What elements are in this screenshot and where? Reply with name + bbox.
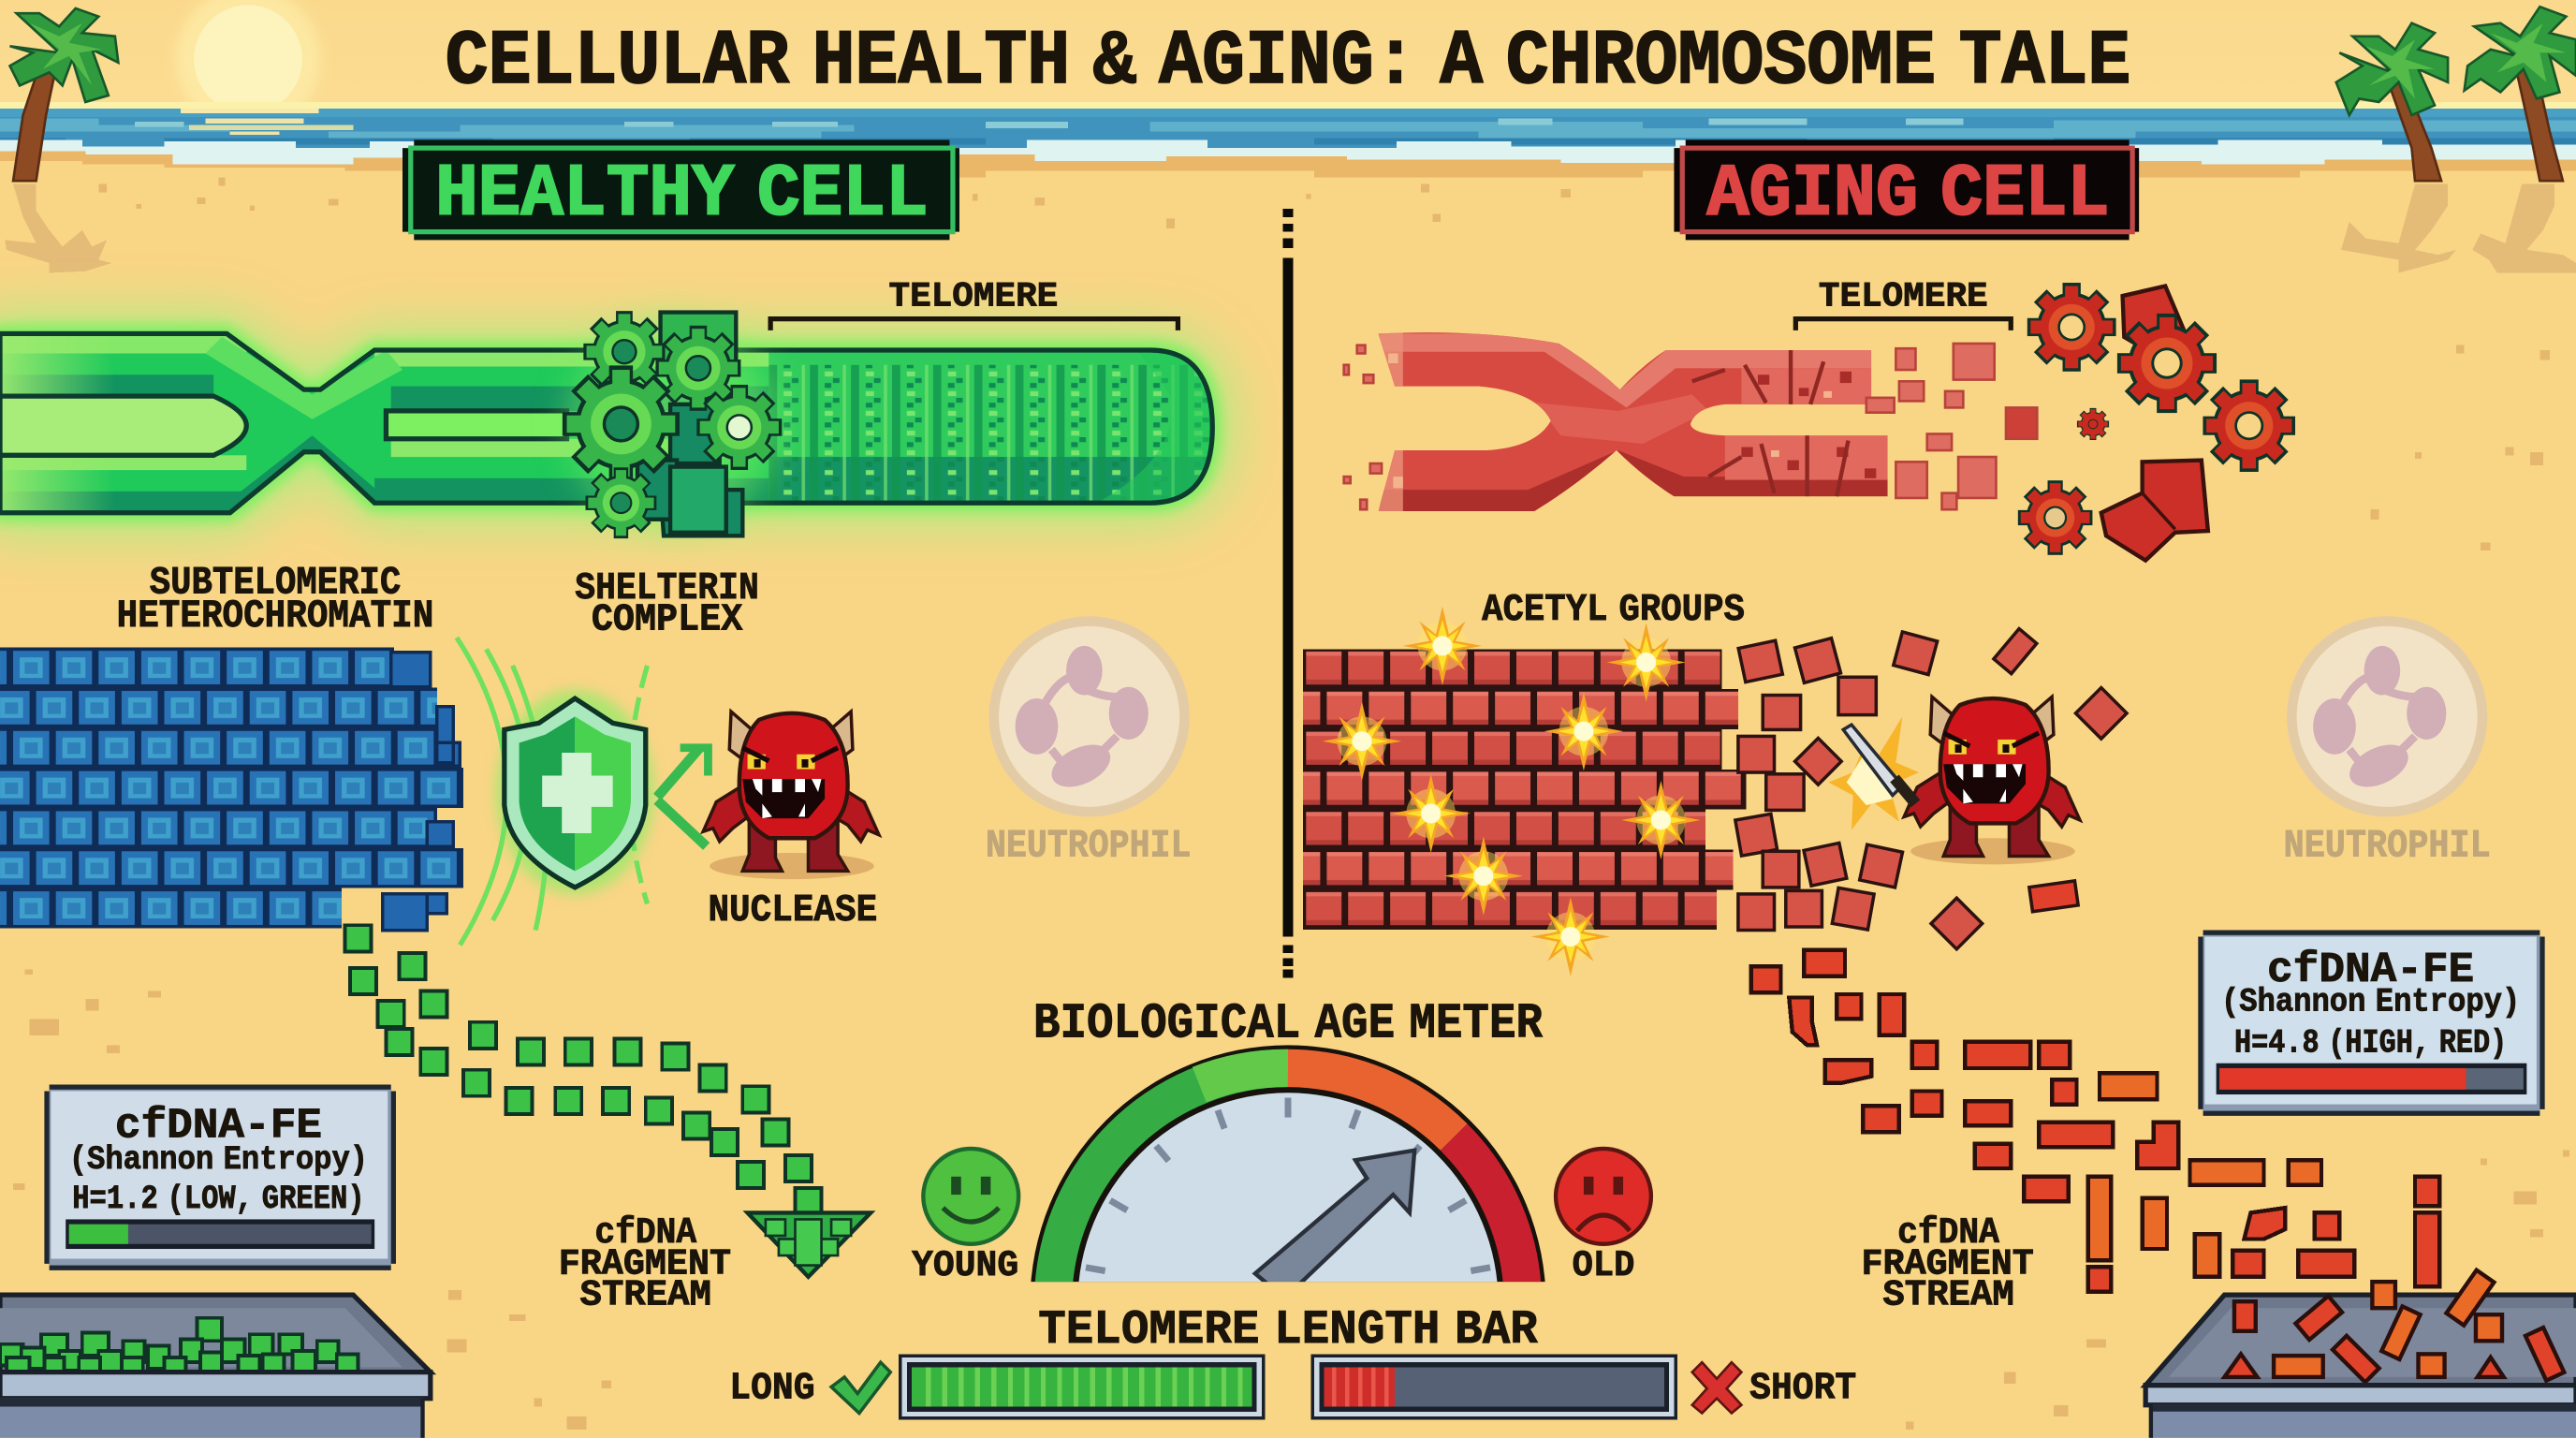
label: telomere bracket healthy [770, 278, 1178, 330]
label: cfDNA stream right: FRAGMENT [1862, 1243, 2034, 1284]
label: cfDNA stream left: FRAGMENT [559, 1243, 731, 1284]
label: telomere bracket aging [1795, 278, 2011, 330]
label: telomere bracket healthy: TELOMERE [889, 278, 1058, 317]
aging monster with knife [1828, 697, 2080, 864]
heading: meter: BIOLOGICAL AGE METER [1033, 996, 1543, 1052]
heterochromatin blue block wall [0, 648, 463, 931]
heading: healthy cell: HEALTHY CELL [435, 152, 929, 236]
arrow: green stream arrowhead [748, 1212, 871, 1277]
bin: green fragments [0, 1295, 431, 1438]
icon: check [831, 1362, 890, 1414]
cfDNA-FE panel: aging [2198, 931, 2545, 1116]
healthy chromosome [0, 311, 1249, 542]
aging chromosome [1342, 332, 2039, 511]
neutrophil right: NEUTROPHIL [2284, 824, 2491, 869]
cfDNA-FE panel: healthy [44, 1085, 396, 1270]
label: cfDNA stream left: STREAM [580, 1275, 711, 1316]
label: long: LONG [729, 1368, 815, 1411]
label: subtelomeric heterochromatin: SUBTELOMERIC [150, 561, 401, 606]
label: shelterin complex: COMPLEX [592, 598, 743, 641]
neutrophil right [2284, 616, 2491, 869]
loose bricks [1735, 629, 2127, 949]
heading: length bar: TELOMERE LENGTH BAR [1038, 1304, 1538, 1357]
label: nuclease: NUCLEASE [708, 889, 877, 932]
label: cfDNA stream right [1862, 1212, 2034, 1316]
cfDNA-FE panel: aging: (Shannon Entropy) [2221, 984, 2520, 1021]
red brick wall [1303, 607, 2127, 976]
red cfDNA fragment stream [1751, 950, 2439, 1292]
shield with deflection arcs [457, 638, 654, 945]
knife [1843, 725, 1902, 796]
gauge needle [1255, 1151, 1414, 1299]
scattered broken gears [2018, 283, 2295, 561]
label: cfDNA stream right: STREAM [1882, 1275, 2014, 1316]
label: subtelomeric heterochromatin [117, 561, 433, 638]
palm shadows [5, 184, 2576, 272]
icon: old frowny [1556, 1149, 1651, 1286]
icon: cross [1692, 1362, 1741, 1414]
short bar [1311, 1354, 1677, 1420]
center divider [1283, 209, 1293, 977]
cfDNA-FE panel: aging: cfDNA-FE [2267, 946, 2474, 994]
label: subtelomeric heterochromatin: HETEROCHROMATIN [117, 594, 433, 638]
gauge dial [1031, 1045, 1545, 1283]
sea [0, 102, 2576, 178]
cfDNA-FE panel: healthy: (Shannon Entropy) [69, 1141, 368, 1179]
neutrophil left: NEUTROPHIL [986, 824, 1191, 869]
label: cfDNA stream left [559, 1212, 731, 1316]
green cfDNA fragment stream [345, 925, 822, 1214]
telomere length bar [729, 1304, 1856, 1420]
bin: red fragments [2145, 1270, 2576, 1438]
long bar [899, 1354, 1265, 1420]
palm trees: right [2336, 7, 2576, 181]
label: cfDNA stream right: cfDNA [1897, 1212, 2000, 1254]
label: shelterin complex [575, 567, 759, 641]
neutrophil left [986, 616, 1191, 869]
label: cfDNA stream left: cfDNA [594, 1212, 697, 1254]
label: acetyl groups: ACETYL GROUPS [1482, 589, 1745, 632]
cfDNA-FE panel: aging: H=4.8 (HIGH, RED) [2234, 1024, 2507, 1062]
nuclease monster [703, 712, 879, 879]
sun [165, 0, 345, 132]
cfDNA-FE panel: healthy: cfDNA-FE [115, 1102, 322, 1151]
biological age meter [1031, 1004, 1545, 1283]
palm tree: left [10, 8, 118, 181]
fragments [1344, 344, 2037, 509]
icon: old frowny: OLD [1573, 1245, 1634, 1286]
label: shelterin complex: SHELTERIN [575, 567, 759, 610]
flash [1828, 716, 1919, 829]
cfDNA-FE panel: healthy: H=1.2 (LOW, GREEN) [72, 1181, 365, 1218]
label: short: SHORT [1749, 1368, 1856, 1411]
heading: aging cell: AGING CELL [1707, 152, 2110, 236]
icon: young smiley [912, 1149, 1018, 1286]
shelterin complex gears [563, 311, 782, 538]
label: telomere bracket aging: TELOMERE [1819, 278, 1988, 317]
acetyl star sparks [1323, 607, 1701, 976]
arrow: deflected green arrows [657, 748, 708, 846]
icon: young smiley: YOUNG [912, 1245, 1018, 1286]
title: CELLULAR HEALTH & AGING: A CHROMOSOME TALE [446, 18, 2130, 106]
